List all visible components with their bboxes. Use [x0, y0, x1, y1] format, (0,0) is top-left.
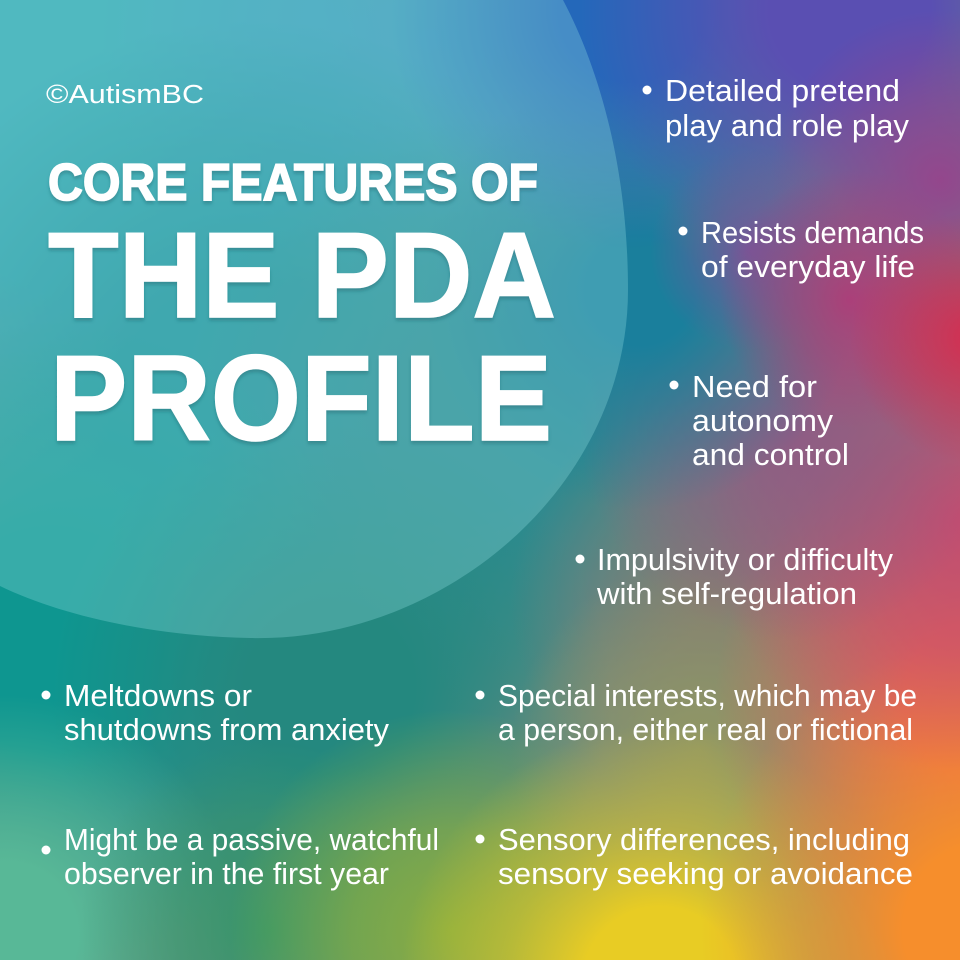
bullet: autonomy: Need for [692, 370, 817, 404]
title line: profile: PROFILE [50, 330, 552, 466]
bullet: passive observer: Might be a passive, watchful [64, 823, 439, 857]
bullet: special interests [476, 679, 917, 747]
bullet: impulsivity: with self-regulation [596, 577, 857, 611]
bullet: pretend play: Detailed pretend [665, 74, 900, 108]
bullet: special interests: Special interests, which may be [498, 679, 917, 713]
bullet: meltdowns: shutdowns from anxiety [64, 713, 390, 747]
bullet: autonomy [670, 370, 849, 472]
bullet: pretend play [642, 74, 910, 143]
bullet: passive observer: observer in the first year [64, 857, 389, 891]
bullet: impulsivity [576, 543, 894, 611]
bullet: resists demands [678, 216, 924, 284]
bullet: passive observer [42, 823, 439, 891]
bullet: sensory differences: Sensory differences, including [498, 823, 910, 857]
bullet: resists demands: Resists demands [701, 216, 924, 250]
bullet: sensory differences: sensory seeking or avoidance [498, 857, 913, 891]
bullet: meltdowns: Meltdowns or [64, 679, 252, 713]
bullet: autonomy: and control [692, 438, 849, 472]
bullet: pretend play: play and role play [665, 109, 910, 143]
bullet: impulsivity: Impulsivity or difficulty [597, 543, 894, 577]
bullet: resists demands: of everyday life [701, 250, 915, 284]
bullet: autonomy: autonomy [692, 404, 834, 438]
bullet: meltdowns [42, 679, 390, 747]
bullet: sensory differences [476, 823, 913, 891]
copyright label: ©AutismBC [46, 81, 204, 109]
bullet: special interests: a person, either real or fictional [498, 713, 913, 747]
title line: the pda: THE PDA [48, 207, 556, 343]
translucent blob panel [0, 0, 628, 638]
title line: core features of: CORE FEATURES OF [48, 154, 538, 212]
title [48, 154, 556, 466]
